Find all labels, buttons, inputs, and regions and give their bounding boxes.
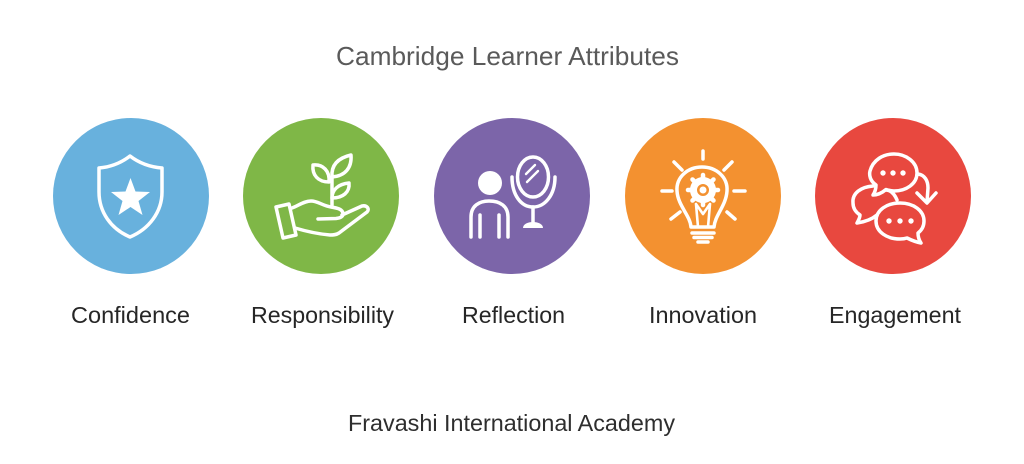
- panel: reflection: [434, 118, 590, 328]
- panel: engagement: [815, 118, 971, 328]
- label: innovation: Innovation: [649, 302, 757, 328]
- circle: reflection: [434, 118, 590, 274]
- icon: light bulb with gear: [662, 151, 745, 242]
- circle: innovation: [625, 118, 781, 274]
- icon: person and mirror: [471, 157, 555, 237]
- panel: responsibility: [243, 118, 399, 328]
- panel: innovation: [625, 118, 781, 328]
- label: responsibility: Responsibility: [251, 302, 394, 328]
- panel: confidence: [53, 118, 209, 328]
- icon: speech bubbles with arrow: [853, 154, 936, 243]
- circle: confidence: [53, 118, 209, 274]
- title: Cambridge Learner Attributes: [336, 41, 679, 71]
- circle: engagement: [815, 118, 971, 274]
- label: engagement: Engagement: [829, 302, 961, 328]
- footer: Fravashi International Academy: [348, 410, 676, 436]
- label: reflection: Reflection: [462, 302, 565, 328]
- circle: responsibility: [243, 118, 399, 274]
- icon: hand holding plant: [276, 155, 368, 238]
- label: confidence: Confidence: [71, 302, 190, 328]
- icon: shield with star: [99, 156, 162, 237]
